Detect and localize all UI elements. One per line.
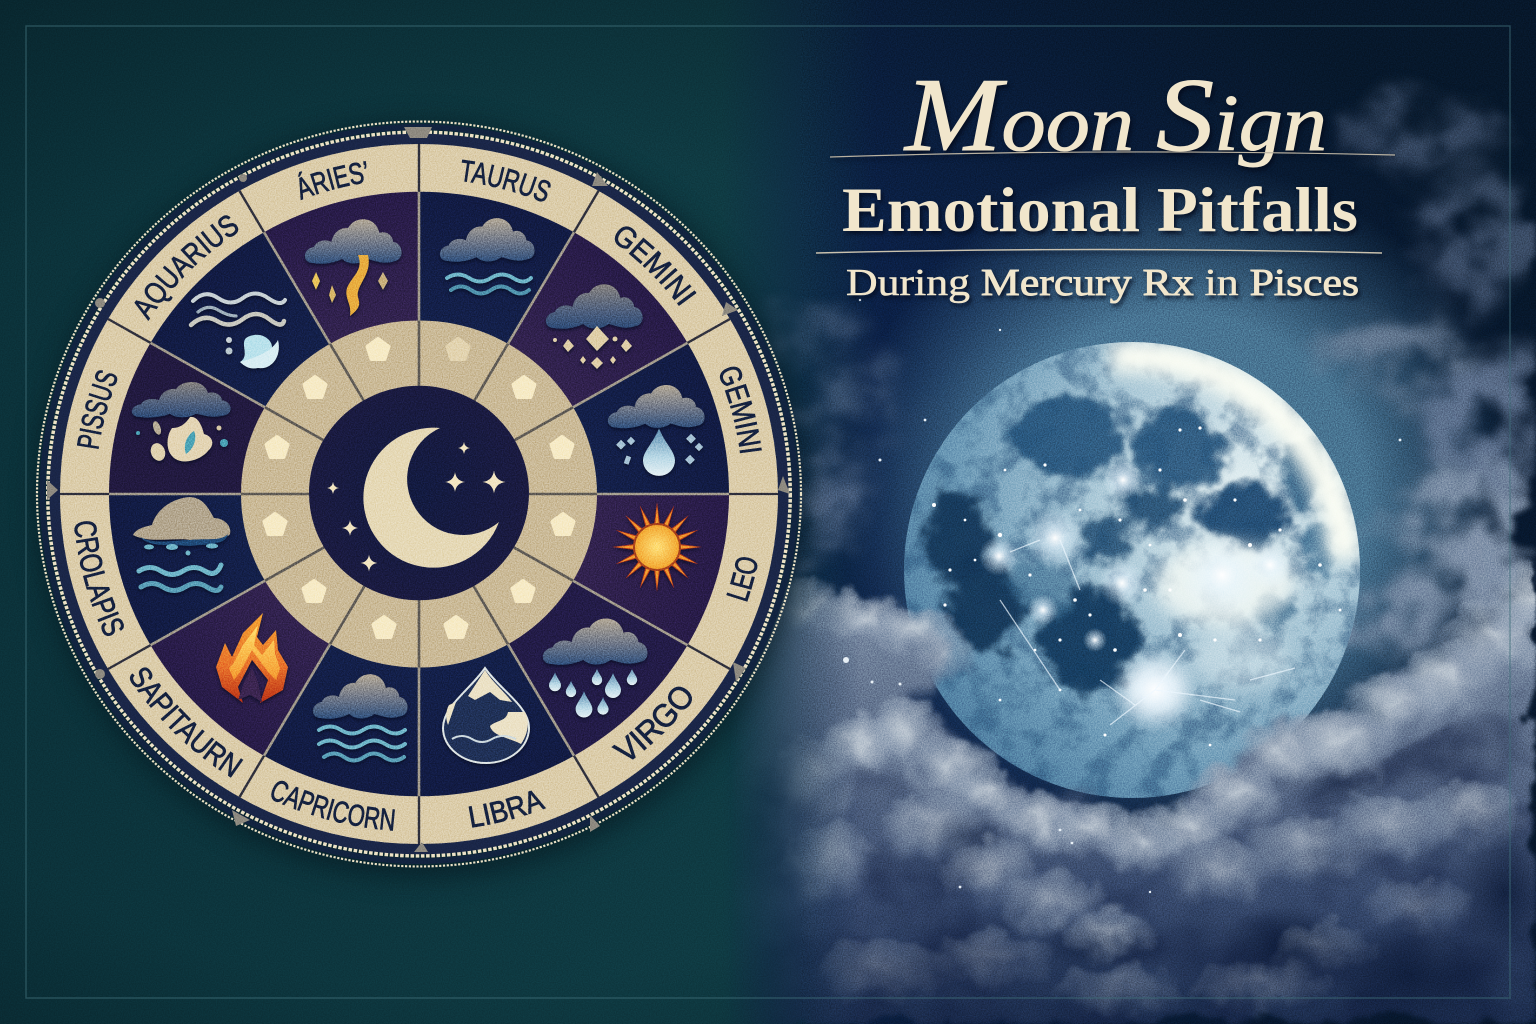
- wheel grain: [50, 130, 790, 860]
- icon: Libra drop globe: [443, 668, 529, 763]
- label: Crolapis: CROLAPIS: [74, 521, 124, 636]
- label: Aquarius: AQUARIUS: [134, 215, 238, 321]
- icon: Scorpio cloud with waves: [133, 497, 230, 590]
- icon: Leo sun: [612, 502, 702, 592]
- icon panels: [109, 192, 729, 796]
- rule under heading: [816, 250, 1382, 253]
- moon bright rim and highlights: [1110, 357, 1345, 714]
- label: Gemini: GEMINI: [614, 226, 696, 306]
- moon halo: [840, 160, 1520, 840]
- rule under Moon Sign: [830, 152, 1395, 157]
- central hub: [309, 386, 529, 600]
- wheel shadow: [38, 124, 806, 876]
- label: Sapitaurn: SAPITAURN: [130, 667, 244, 778]
- label: Pissus: PISSUS: [76, 370, 118, 449]
- moon sparkles: [932, 426, 1341, 746]
- zodiac wheel: [36, 120, 802, 868]
- label: Aries: ÁRIES’: [298, 161, 366, 200]
- crescent moon and stars: [327, 428, 506, 572]
- icon: Pisces cloud with leaf shape: [132, 382, 231, 463]
- label: Libra: LIBRA: [468, 790, 546, 828]
- icon: Aries storm cloud with lightning: [305, 219, 402, 316]
- icon: Gemini cloud with water drop: [608, 385, 705, 476]
- cloud dark pockets: [913, 752, 1536, 1024]
- title: Moon Sign: Moon Sign: [903, 56, 1327, 173]
- label: Capricorn: CAPRICORN: [271, 780, 395, 831]
- ring pentagons: [264, 339, 574, 637]
- icon: Taurus cloud with waves: [440, 218, 535, 294]
- cloud stars: [843, 299, 1401, 893]
- label: Leo: LEO: [726, 557, 758, 602]
- overall grain: [0, 0, 800, 1024]
- cloud puffs: [762, 561, 1536, 1018]
- label: Taurus: TAURUS: [462, 160, 551, 202]
- icon: Sagittarius flame: [216, 613, 288, 703]
- moon: [904, 342, 1360, 798]
- cloud hollows: [760, 689, 1533, 1020]
- cloud bank: [700, 590, 1536, 1024]
- clouds grain: [800, 0, 1536, 1024]
- subtitle: During Mercury Rx in Pisces: [846, 262, 1359, 304]
- icon: Gemini cloud with diamonds: [546, 284, 643, 369]
- moon mottling: [904, 342, 1360, 798]
- clouds behind the moon: [770, 110, 1536, 660]
- title block: [816, 56, 1395, 304]
- heading: Emotional Pitfalls: Emotional Pitfalls: [842, 174, 1358, 245]
- wheel rims: [37, 122, 801, 866]
- label: Gemini second: GEMINI: [720, 366, 762, 454]
- moon dark maria: [923, 357, 1345, 714]
- outer name band: [60, 144, 778, 844]
- icon: Capricorn cloud with waves: [313, 674, 408, 760]
- icon: Virgo cloud with rain drops: [543, 618, 647, 718]
- sign labels: [74, 160, 762, 831]
- icon: Aquarius waves and moon: [191, 294, 285, 369]
- clouds in front of the moon: [700, 561, 1536, 1024]
- label: Virgo: VIRGO: [611, 686, 692, 760]
- inner ring: [241, 320, 597, 668]
- rim markers: [47, 127, 790, 852]
